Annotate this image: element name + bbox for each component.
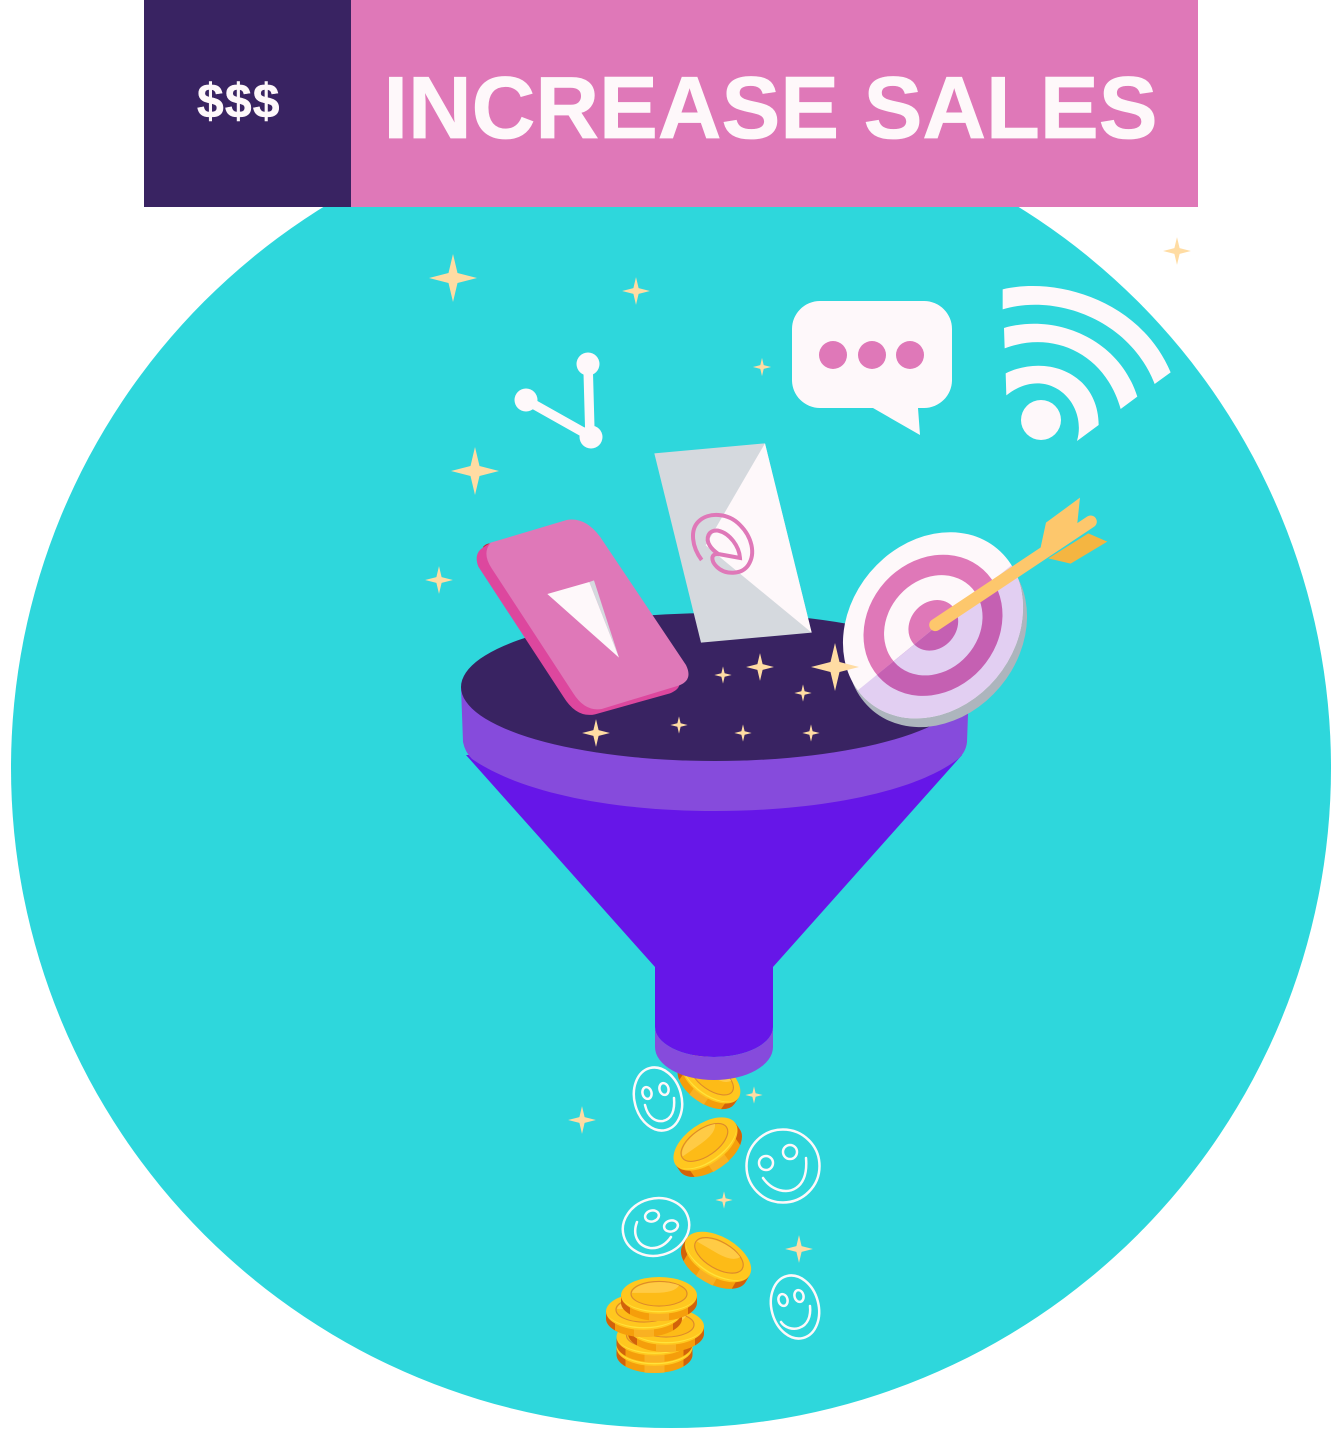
icon: video phone	[477, 520, 688, 715]
play triangle	[547, 580, 619, 658]
smiley faces	[616, 1062, 826, 1344]
funnel opening	[461, 613, 969, 761]
smiley 2	[746, 1130, 820, 1202]
icon: chat bubble	[792, 301, 952, 435]
sparkles	[425, 237, 1191, 1263]
smiley 4	[764, 1270, 826, 1344]
funnel cone	[466, 755, 962, 1057]
banner dollar panel	[144, 0, 352, 207]
title	[351, 0, 1198, 207]
coin stack	[606, 1277, 704, 1373]
icon: wifi	[1003, 286, 1171, 441]
funnel	[461, 613, 969, 1080]
banner	[144, 0, 1198, 207]
smiley 1	[627, 1062, 689, 1136]
funnel spout ring	[655, 1027, 773, 1080]
arrow	[935, 498, 1107, 625]
icon: target with arrow	[842, 498, 1108, 728]
funnel rim	[461, 687, 969, 811]
banner dollar panel: $$$	[197, 76, 281, 128]
icon: share nodes	[514, 352, 602, 448]
falling coins	[664, 1107, 760, 1299]
title: INCREASE SALES	[384, 58, 1158, 157]
smiley 3	[616, 1191, 696, 1263]
icon: email envelope	[654, 443, 812, 643]
falling coin behind spout	[669, 1045, 749, 1119]
at sign	[693, 515, 752, 573]
